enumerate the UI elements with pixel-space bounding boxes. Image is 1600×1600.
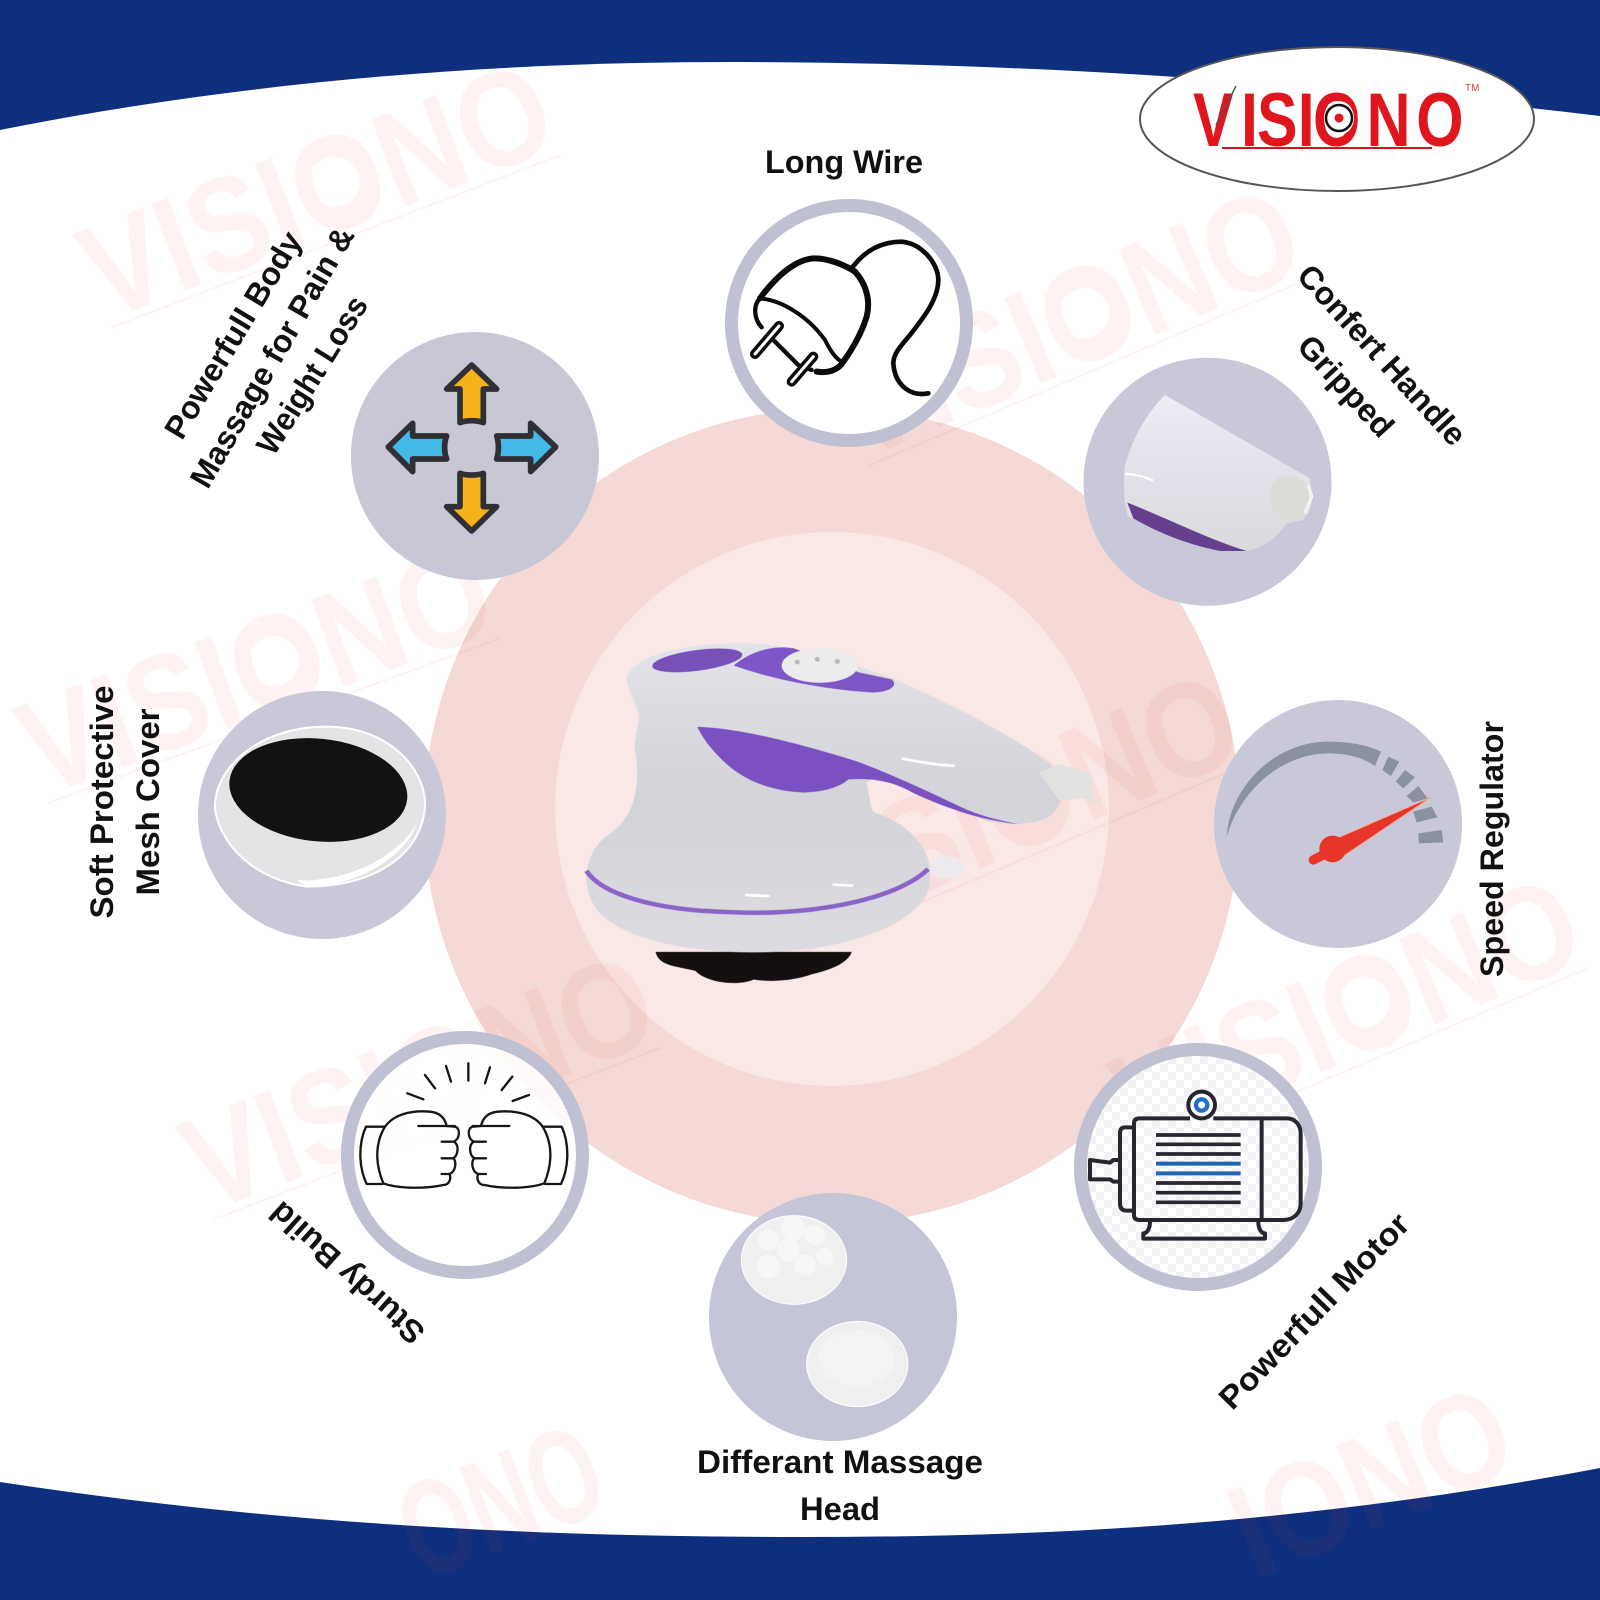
watermarks: VISIONO	[163, 924, 674, 1241]
watermarks: VISIONO	[61, 32, 572, 349]
label: Speed Regulator: Speed Regulator	[1474, 721, 1510, 977]
purple badge	[651, 644, 744, 677]
panel: comfort handle grip	[1084, 358, 1332, 606]
panel: soft protective mesh cover	[198, 691, 446, 939]
label: Differant Massage Head: Differant Massage	[697, 1444, 983, 1480]
panel: powerful body massage	[351, 332, 599, 580]
logo: Visiono oval: TM	[1465, 83, 1479, 94]
purple band	[586, 869, 928, 913]
small side tab	[929, 856, 964, 879]
panel: speed regulator	[1214, 700, 1462, 948]
label: Differant Massage Head	[697, 1444, 983, 1527]
icon: two fists bumping	[360, 1063, 567, 1188]
panel: long wire icon	[732, 206, 966, 440]
panel: massage heads	[709, 1193, 957, 1441]
icon: speedometer	[1227, 742, 1443, 862]
product image: handheld massager	[586, 643, 1094, 983]
panel: sturdy build	[348, 1038, 582, 1272]
label: Powerfull Body Massage for Pain & Weight Loss: Massage for Pain &	[183, 220, 361, 494]
heading: Long Wire: Long Wire	[765, 144, 923, 180]
watermarks: VISIONO	[0, 515, 512, 824]
image: handle end	[1124, 395, 1319, 551]
logo: Visiono oval: VISIONO	[1193, 78, 1463, 163]
icon: four direction arrows	[388, 365, 556, 531]
outer pink circle	[424, 408, 1240, 1224]
image: mesh cover	[215, 727, 425, 887]
label: Powerfull Motor: Powerfull Motor	[1211, 1206, 1417, 1416]
logo: Visiono oval	[1140, 47, 1534, 191]
label: Powerfull Body Massage for Pain & Weight Loss: Powerfull Body	[157, 225, 309, 445]
purple grip	[697, 727, 1019, 824]
speed knob	[782, 648, 858, 683]
label: Confert Handle Gripped: Confert Handle	[1290, 257, 1474, 453]
label: Soft Protective Mesh Cover: Soft Protective	[84, 686, 120, 918]
label: Powerfull Body Massage for Pain & Weight Loss: Weight Loss	[249, 289, 375, 461]
cord tip	[1039, 764, 1094, 804]
highlights	[746, 759, 954, 896]
label: Sturdy Build: Sturdy Build	[262, 1194, 432, 1352]
panel: powerful motor	[1080, 1050, 1316, 1284]
inner pale circle	[555, 532, 1109, 1086]
black massage head	[655, 952, 852, 983]
watermarks: VISIONO	[812, 157, 1322, 488]
label: Differant Massage Head: Head	[800, 1491, 880, 1527]
icon: electric motor	[1090, 1092, 1301, 1239]
label: Soft Protective Mesh Cover	[84, 686, 166, 918]
image: two massage heads	[741, 1216, 908, 1407]
watermarks: VISIONO	[751, 642, 1261, 973]
white body	[586, 643, 1063, 952]
label: Confert Handle Gripped: Gripped	[1291, 328, 1401, 444]
icon: plug and cord	[755, 242, 938, 394]
purple control panel	[734, 647, 894, 693]
label: Soft Protective Mesh Cover: Mesh Cover	[130, 708, 166, 896]
watermarks: IONO	[1208, 1355, 1534, 1600]
